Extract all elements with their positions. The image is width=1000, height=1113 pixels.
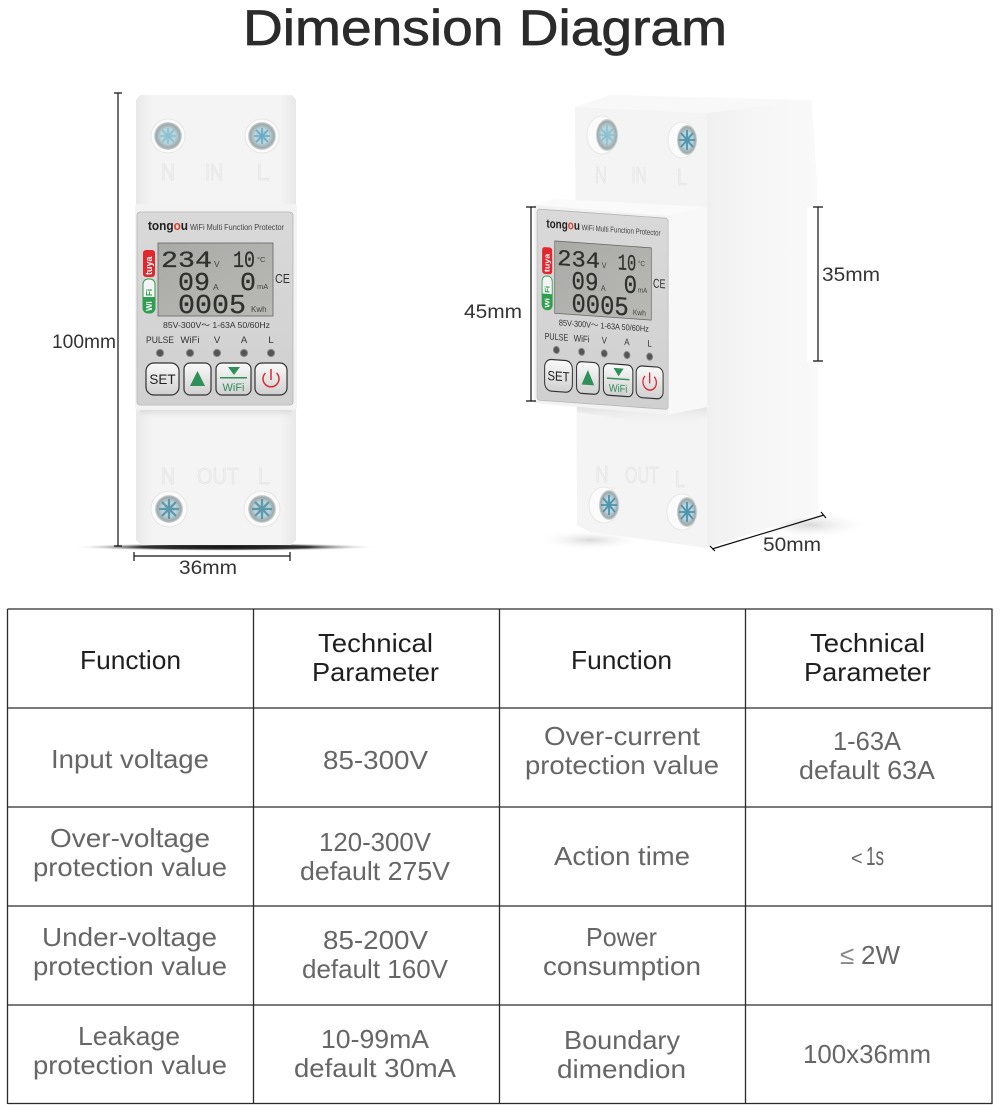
product name: WiFi Multi Function Protector	[190, 223, 284, 232]
control panel	[137, 212, 293, 405]
up button	[577, 361, 599, 395]
row: over-voltage and action time: Action time	[554, 841, 690, 871]
wifi badge: Fi	[543, 286, 552, 293]
angled view product photo	[534, 95, 870, 550]
LCD screen: A	[601, 283, 606, 293]
moulded input labels: IN	[632, 162, 646, 188]
row: input voltage and over-current: protection value	[525, 750, 719, 780]
rail width dimension 35mm: 35mm	[822, 265, 880, 286]
depth dimension 50mm: 50mm	[763, 535, 821, 556]
row: input voltage and over-current: Input voltage	[51, 744, 209, 774]
control panel	[537, 209, 668, 409]
front view product photo	[70, 95, 380, 551]
row: under-voltage and power consumption	[33, 922, 900, 984]
LCD screen: °C	[257, 255, 266, 264]
ground shadow	[535, 530, 645, 550]
indicator labels	[146, 335, 274, 346]
floor shadow	[70, 543, 380, 551]
side ground shadow	[750, 511, 870, 539]
tuya badge: tuya	[144, 256, 154, 275]
row: over-voltage and action time: protection value	[33, 852, 227, 882]
header row	[80, 628, 931, 687]
display module frame	[135, 204, 297, 410]
LCD screen: V	[602, 261, 607, 271]
front face	[575, 107, 707, 548]
height dimension 100mm	[52, 93, 122, 546]
bottom right screw	[244, 491, 280, 527]
moulded output labels: N	[596, 461, 608, 487]
moulded input labels: N	[161, 159, 175, 185]
row: leakage and boundary dimension: default 30mA	[294, 1053, 457, 1083]
indicator labels: PULSE	[146, 335, 174, 346]
bottom left screw	[151, 491, 187, 527]
row: under-voltage and power consumption: consumption	[543, 951, 701, 981]
CE mark: CE	[653, 276, 666, 292]
down WiFi button: WiFi	[222, 382, 244, 394]
indicator labels: A	[241, 335, 248, 346]
SET button	[545, 359, 572, 393]
row: under-voltage and power consumption: default 160V	[302, 954, 449, 984]
LCD screen: 10	[233, 248, 255, 274]
moulded input labels	[161, 159, 270, 185]
row: leakage and boundary dimension: Leakage	[78, 1021, 180, 1051]
top screw N	[587, 116, 618, 154]
top right screw	[245, 119, 279, 153]
LCD screen: °C	[638, 259, 645, 268]
rating line: 85V-300V～ 1-63A 50/60Hz	[163, 320, 270, 330]
LCD screen: Kwh	[633, 307, 646, 318]
LCD screen: 10	[618, 251, 636, 278]
row: leakage and boundary dimension: protection value	[33, 1050, 227, 1080]
row: over-voltage and action time: <	[851, 848, 863, 870]
wifi badge: Wi	[543, 298, 552, 308]
moulded output labels: L	[258, 463, 271, 489]
tuya badge: tuya	[543, 253, 552, 272]
LCD screen: Kwh	[251, 305, 267, 314]
row: under-voltage and power consumption: 85-200V	[323, 925, 429, 955]
wifi badge	[542, 276, 552, 310]
tuya badge	[542, 247, 552, 274]
bottom screw N	[589, 487, 619, 523]
moulded output labels: L	[675, 466, 685, 492]
down WiFi button	[603, 363, 633, 397]
indicator lights	[553, 346, 653, 360]
LCD screen	[158, 243, 273, 322]
indicator labels: PULSE	[545, 331, 568, 343]
LCD screen: 0	[624, 272, 637, 302]
LCD screen	[555, 241, 651, 326]
LCD screen: mA	[638, 287, 648, 295]
LCD screen: 09	[572, 268, 598, 299]
header row: Technical	[318, 628, 433, 658]
bottom screw L	[667, 494, 697, 530]
moulded input labels: L	[257, 159, 270, 185]
moulded output labels	[596, 461, 685, 492]
depth dimension 50mm	[710, 512, 826, 556]
row: input voltage and over-current: default 63A	[799, 755, 936, 785]
row: leakage and boundary dimension: dimendion	[557, 1054, 686, 1084]
row: under-voltage and power consumption: Under-voltage	[42, 922, 217, 952]
indicator labels: L	[647, 338, 652, 349]
indicator labels: V	[214, 335, 221, 346]
row: leakage and boundary dimension: 100x36mm	[803, 1039, 931, 1069]
LCD screen: 234	[557, 247, 600, 275]
row: over-voltage and action time	[33, 823, 884, 886]
LCD screen: mA	[257, 282, 268, 291]
wifi badge: Wi	[145, 301, 154, 311]
module shadow	[577, 402, 707, 426]
width dimension 36mm: 36mm	[179, 558, 237, 579]
down WiFi button: WiFi	[609, 383, 627, 396]
table grid	[8, 609, 992, 1104]
header row: Function	[571, 645, 672, 675]
module height dimension 45mm	[464, 207, 536, 401]
indicator labels	[545, 331, 652, 349]
rating line: 85V-300V～ 1-63A 50/60Hz	[559, 318, 649, 334]
indicator labels: WiFi	[574, 333, 590, 345]
indicator labels: A	[624, 336, 630, 347]
module shadow	[140, 409, 292, 421]
row: under-voltage and power consumption: 2W	[861, 940, 900, 970]
moulded output labels: OUT	[625, 462, 659, 488]
module height dimension 45mm: 45mm	[464, 302, 522, 323]
specification table	[8, 609, 992, 1104]
wifi badge: Fi	[145, 289, 154, 296]
row: over-voltage and action time: 1s	[866, 841, 884, 871]
brand logo: tongou	[148, 219, 188, 233]
row: over-voltage and action time: default 275V	[300, 856, 451, 886]
row: over-voltage and action time: Over-voltage	[50, 823, 210, 853]
width dimension 36mm	[134, 552, 290, 579]
moulded input labels: L	[677, 164, 687, 190]
LCD screen: 09	[178, 268, 210, 298]
header row: Parameter	[312, 657, 439, 687]
rail width dimension 35mm	[813, 207, 880, 361]
device body front	[136, 95, 296, 545]
row: under-voltage and power consumption: Power	[586, 922, 657, 952]
down WiFi button	[216, 363, 251, 395]
LCD screen: 0	[240, 268, 256, 298]
product name: WiFi Multi Function Protector	[582, 222, 661, 238]
row: input voltage and over-current: 85-300V	[323, 745, 429, 775]
row: under-voltage and power consumption: protection value	[33, 951, 227, 981]
moulded output labels: N	[161, 463, 175, 489]
row: leakage and boundary dimension: Boundary	[564, 1025, 680, 1055]
row: over-voltage and action time: 120-300V	[319, 827, 432, 857]
CE mark: CE	[275, 271, 290, 286]
LCD screen: 0005	[178, 292, 246, 322]
up button	[184, 363, 211, 395]
LCD screen: 234	[161, 248, 212, 274]
row: input voltage and over-current	[51, 721, 936, 785]
indicator labels: WiFi	[180, 335, 200, 346]
row: leakage and boundary dimension	[33, 1021, 931, 1084]
row: input voltage and over-current: Over-current	[544, 721, 701, 751]
indicator labels: L	[268, 335, 274, 346]
moulded input labels	[595, 162, 687, 190]
module side surface	[668, 207, 707, 415]
tuya badge	[143, 250, 155, 277]
power button	[636, 366, 663, 399]
wifi badge	[143, 279, 155, 313]
top screw L	[668, 122, 697, 158]
power button	[255, 363, 287, 395]
row: under-voltage and power consumption: ≤	[840, 940, 854, 970]
row: input voltage and over-current: 1-63A	[833, 726, 902, 756]
LCD screen: 0005	[572, 290, 629, 324]
SET button: SET	[547, 368, 570, 385]
moulded output labels: OUT	[197, 463, 239, 489]
moulded input labels: IN	[205, 159, 223, 185]
top left screw	[151, 119, 185, 153]
moulded input labels: N	[595, 162, 607, 188]
indicator lights	[156, 349, 275, 357]
side face	[707, 100, 818, 548]
title: Dimension Diagram	[243, 0, 727, 56]
brand logo: tongou	[546, 218, 580, 233]
header row: Function	[80, 645, 181, 675]
moulded output labels	[161, 463, 271, 489]
module top surface	[534, 199, 707, 216]
indicator labels: V	[602, 335, 607, 346]
SET button: SET	[149, 372, 176, 387]
header row: Parameter	[804, 657, 931, 687]
LCD screen: A	[213, 282, 219, 292]
SET button	[146, 363, 179, 395]
LCD screen: V	[214, 259, 220, 269]
top face	[575, 95, 812, 113]
height dimension 100mm: 100mm	[52, 332, 116, 353]
header row: Technical	[810, 628, 925, 658]
module front margin	[534, 205, 668, 415]
row: leakage and boundary dimension: 10-99mA	[321, 1024, 430, 1054]
